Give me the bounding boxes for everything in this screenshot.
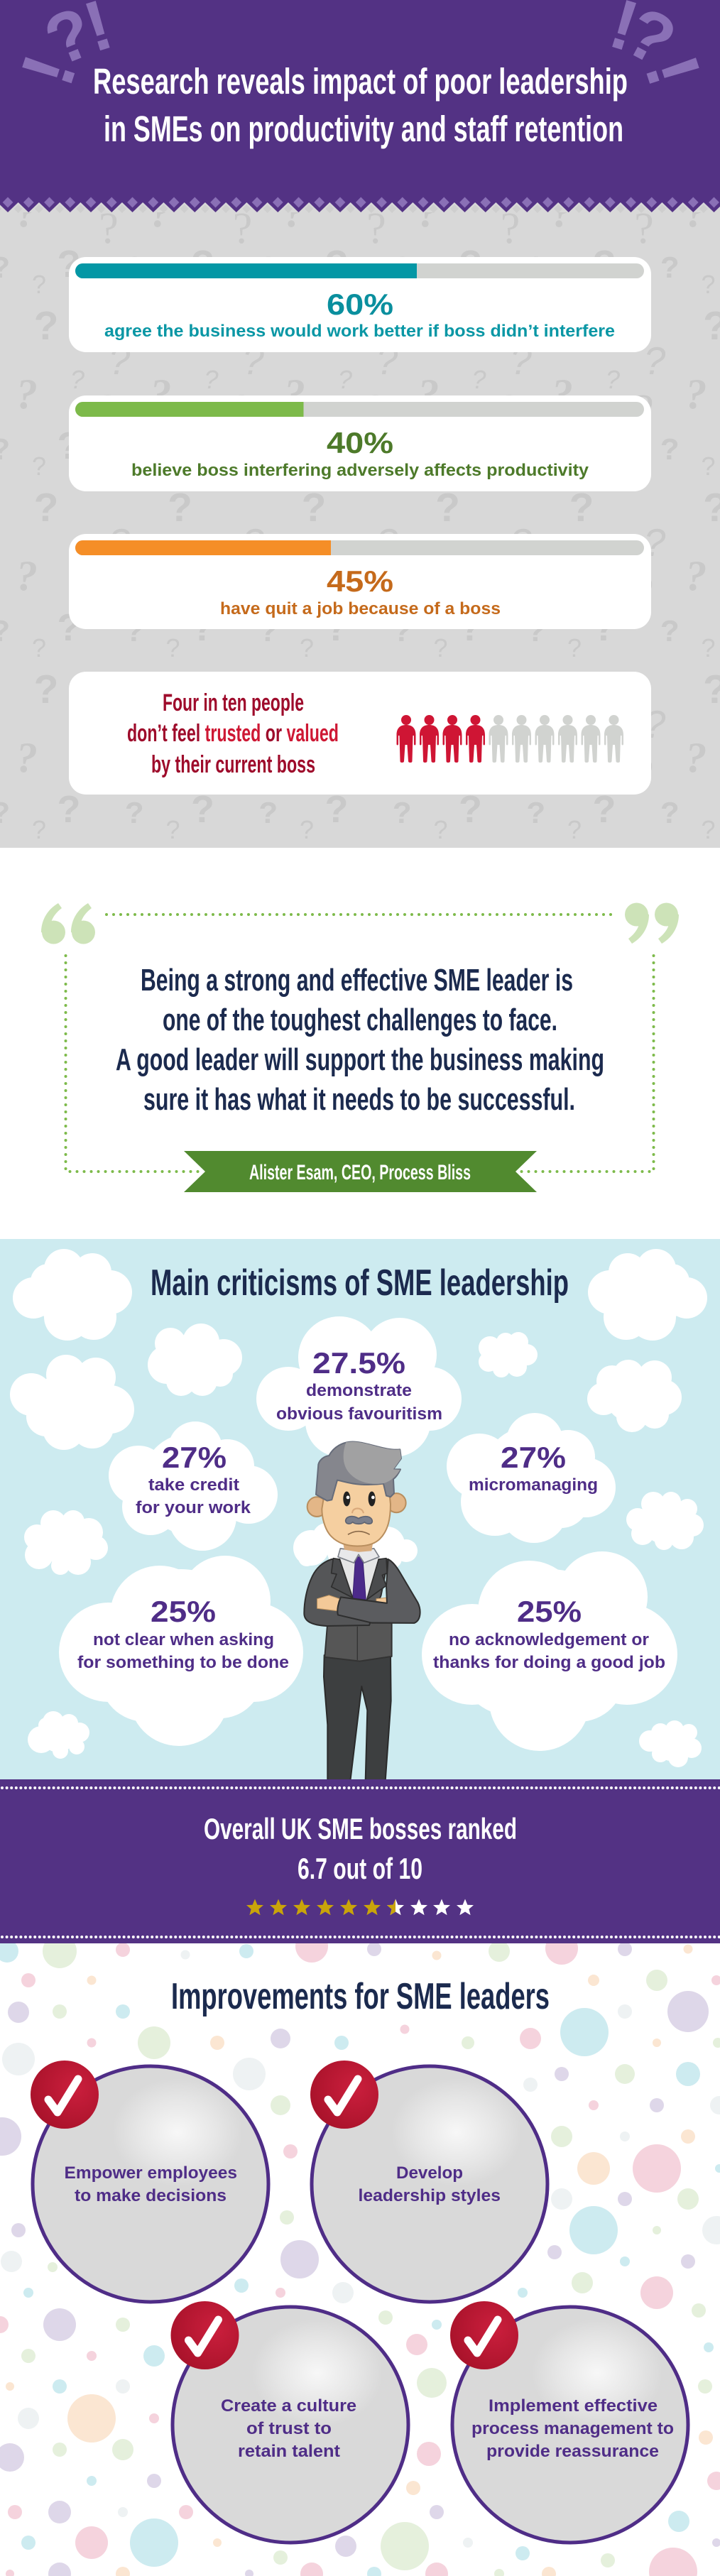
stat card: 40%: 40% xyxy=(327,426,393,459)
cloud callout: take credit: 27% xyxy=(162,1441,227,1474)
cloud callout: favouritism: demonstrate xyxy=(306,1381,412,1400)
icon row: people xyxy=(396,715,623,763)
rating text xyxy=(204,1812,517,1885)
rating text: Overall UK SME bosses ranked xyxy=(204,1812,517,1845)
star rating xyxy=(246,1899,474,1915)
stat card: 40% xyxy=(69,395,651,491)
stat card: 60%: agree the business would work better if boss didn’t interfere xyxy=(104,322,615,341)
improvement circle: process management: process management to xyxy=(471,2419,674,2438)
grey statistics background xyxy=(0,199,720,848)
improvement circle: culture of trust: Create a culture xyxy=(221,2396,356,2416)
decorative punctuation: ! xyxy=(629,46,716,96)
cloud callout: take credit xyxy=(109,1421,278,1551)
header banner xyxy=(0,0,720,213)
stat card: 40%: believe boss interfering adversely affects productivity xyxy=(131,461,589,480)
icon: check badge xyxy=(170,2301,239,2369)
improvement circle: empower: Empower employees xyxy=(64,2163,237,2183)
icon: closing quote mark xyxy=(625,903,679,944)
heading: improvements: Improvements for SME leaders xyxy=(171,1976,550,2017)
improvement circle: empower: to make decisions xyxy=(75,2186,227,2205)
rating band xyxy=(0,1779,720,1943)
cloud callout: not clear xyxy=(59,1556,303,1746)
improvement circle: culture of trust xyxy=(170,2301,408,2543)
improvement circle: culture of trust: retain talent xyxy=(238,2442,340,2461)
cloud callout: not clear: for something to be done xyxy=(77,1653,289,1672)
improvement circle: process management: provide reassurance xyxy=(486,2442,659,2461)
improvement circle: process management xyxy=(450,2301,688,2543)
improvement circle: leadership styles: Develop xyxy=(396,2163,463,2183)
cloud callout: no acknowledgement: no acknowledgement or xyxy=(449,1630,649,1649)
background clouds xyxy=(10,1249,707,1767)
improvement circle: leadership styles xyxy=(310,2061,547,2302)
cloud callout: no acknowledgement xyxy=(422,1551,677,1751)
cloud callout: not clear: not clear when asking xyxy=(93,1630,274,1649)
cloud callout: no acknowledgement: thanks for doing a good job xyxy=(433,1653,665,1672)
icon: check badge xyxy=(450,2301,518,2369)
cloud callout: favouritism: obvious favouritism xyxy=(276,1404,442,1424)
decorative punctuation xyxy=(5,0,716,96)
stat card: 45%: 45% xyxy=(327,564,393,598)
stat card: 45%: have quit a job because of a boss xyxy=(220,599,501,618)
cloud callout: favouritism: 27.5% xyxy=(312,1346,405,1380)
stat card: 60% xyxy=(69,257,651,352)
icon: check badge xyxy=(310,2061,378,2129)
improvement circle: culture of trust: of trust to xyxy=(246,2419,332,2438)
cloud callout: not clear: 25% xyxy=(151,1595,216,1628)
cloud callout: favouritism xyxy=(256,1316,462,1457)
cloud callout: take credit: for your work xyxy=(136,1498,251,1517)
illustration: frowning boss with crossed arms xyxy=(304,1442,420,1781)
improvement circle: leadership styles: leadership styles xyxy=(358,2186,501,2205)
stat card: 60%: 60% xyxy=(327,288,393,321)
card text: by their current boss xyxy=(151,751,315,778)
criticisms panel xyxy=(0,1239,720,1781)
cloud callout: micromanaging: micromanaging xyxy=(469,1475,598,1495)
stat card: 45% xyxy=(69,534,651,629)
card text xyxy=(127,689,339,778)
quote text xyxy=(116,963,604,1117)
cloud callout: micromanaging xyxy=(447,1413,616,1543)
rating text: 6.7 out of 10 xyxy=(298,1852,422,1885)
decorative punctuation: ! xyxy=(5,45,92,95)
card text: Four in ten people xyxy=(163,689,304,716)
icon: check badge xyxy=(31,2061,99,2129)
quote panel xyxy=(0,848,720,1239)
title xyxy=(93,61,628,149)
attribution ribbon xyxy=(184,1151,537,1192)
attribution ribbon: Alister Esam, CEO, Process Bliss xyxy=(249,1161,471,1184)
cloud callout: take credit: take credit xyxy=(148,1475,239,1495)
card text: don’t feel trusted or valued xyxy=(127,720,339,747)
improvement circle: process management: Implement effective xyxy=(489,2396,658,2416)
stat card: four in ten xyxy=(69,672,651,795)
improvement circle: empower xyxy=(31,2061,268,2302)
cloud callout: no acknowledgement: 25% xyxy=(517,1595,582,1628)
polka-dot background xyxy=(0,1930,720,2576)
cloud callout: micromanaging: 27% xyxy=(501,1441,566,1474)
icon: opening quote mark xyxy=(41,903,95,944)
